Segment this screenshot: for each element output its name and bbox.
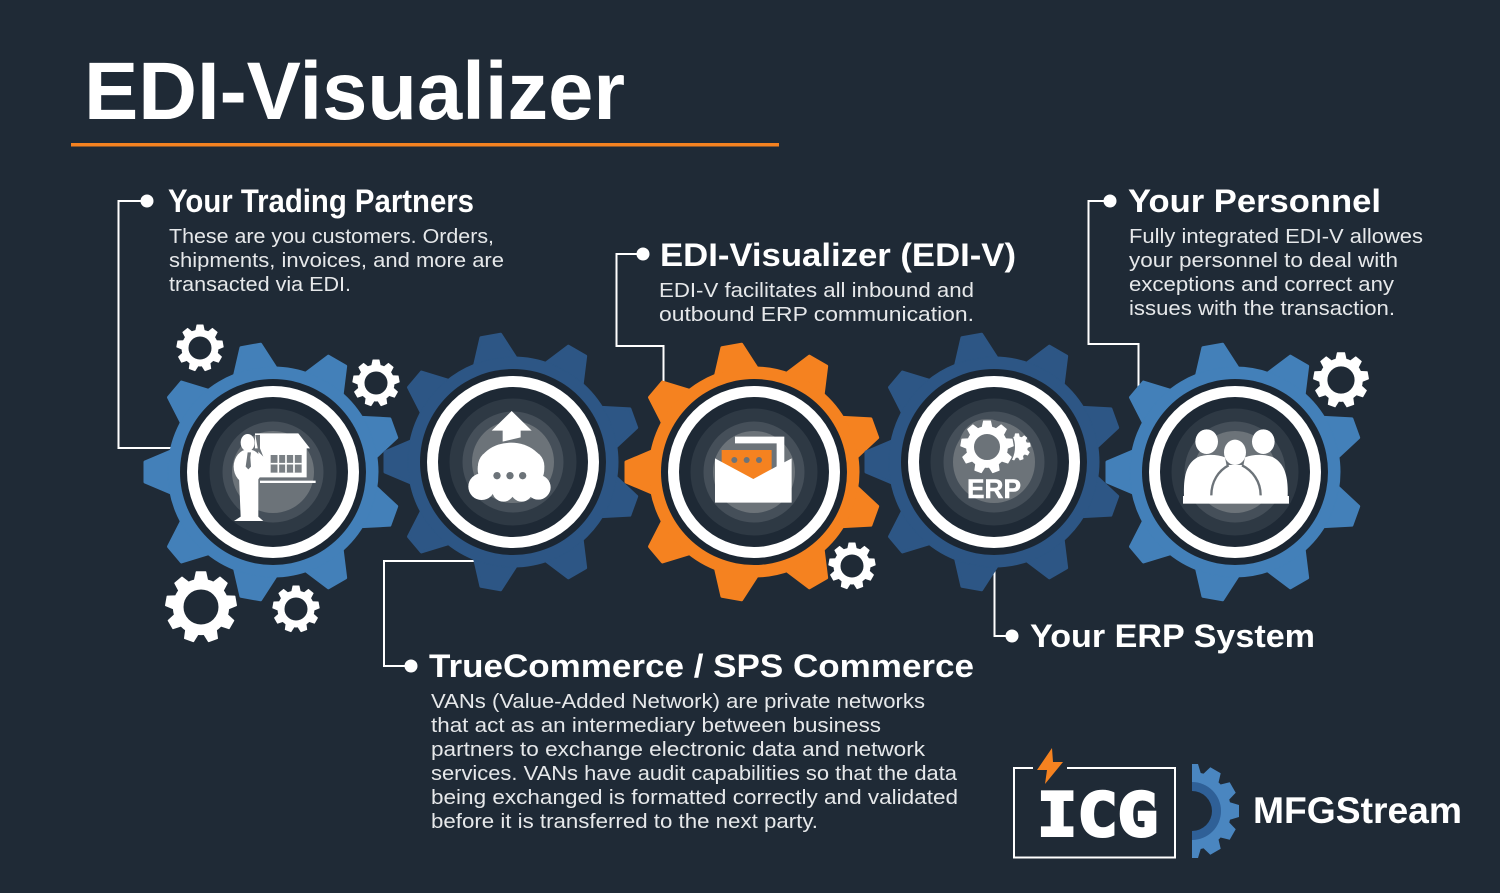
small gear: bottom left large	[165, 572, 237, 642]
body: trading partners: transacted via EDI.	[169, 273, 351, 296]
gear: TrueCommerce / SPS Commerce	[385, 332, 640, 592]
icon: half gear	[1192, 764, 1239, 858]
body: EDI-V	[659, 279, 974, 326]
icon: ERP gears: ERP	[967, 474, 1021, 504]
title underline	[71, 143, 779, 146]
body: trading partners: These are you customers. Orders,	[169, 225, 494, 248]
text block: trading partners	[168, 183, 504, 296]
body: trading partners	[169, 225, 504, 296]
small gear: personnel	[1313, 353, 1369, 407]
heading: personnel: Your Personnel	[1128, 183, 1381, 219]
body: EDI-V: EDI-V facilitates all inbound and	[659, 279, 974, 302]
body: personnel: Fully integrated EDI-V allowes	[1129, 225, 1423, 248]
small gear: top right of first gear	[353, 360, 399, 406]
icon: group of people	[1183, 429, 1289, 504]
body: trading partners: shipments, invoices, and more are	[169, 249, 504, 272]
connector: EDI-V	[616, 248, 664, 386]
gear: personnel	[1107, 342, 1362, 602]
connector: trading partners	[118, 196, 172, 448]
gear: trading partners	[145, 342, 400, 602]
icon: ERP gears	[959, 419, 1031, 504]
logo: MFGStream: MFGStream	[1253, 790, 1462, 831]
text block: EDI-V	[659, 237, 1016, 326]
body: TrueCommerce: partners to exchange electronic data and network	[431, 738, 926, 761]
small gear: bottom	[273, 586, 319, 632]
body: TrueCommerce	[431, 690, 958, 833]
body: TrueCommerce: before it is transferred to the next party.	[431, 810, 818, 833]
body: TrueCommerce: VANs (Value-Added Network) are private networks	[431, 690, 925, 713]
connector: TrueCommerce	[384, 561, 476, 672]
gear: ERP system	[866, 332, 1121, 592]
small gear: below orange gear	[829, 543, 875, 589]
body: personnel: issues with the transaction.	[1129, 297, 1395, 320]
logo: ICG	[1014, 748, 1175, 858]
icon: cloud with arrow	[468, 411, 551, 502]
icon: lightning bolt	[1037, 748, 1063, 784]
logo: ICG: ICG	[1037, 780, 1158, 850]
heading: EDI-V: EDI-Visualizer (EDI-V)	[660, 237, 1016, 273]
icon: person and building	[234, 433, 316, 521]
title: EDI-Visualizer	[84, 46, 625, 137]
body: TrueCommerce: services. VANs have audit capabilities so that the data	[431, 762, 958, 785]
text block: TrueCommerce	[429, 648, 974, 833]
gear: EDI-Visualizer	[626, 342, 881, 602]
body: EDI-V: outbound ERP communication.	[659, 303, 974, 326]
body: personnel: your personnel to deal with	[1129, 249, 1398, 272]
heading: TrueCommerce: TrueCommerce / SPS Commerce	[429, 648, 974, 684]
heading: trading partners: Your Trading Partners	[168, 183, 474, 219]
body: personnel: exceptions and correct any	[1129, 273, 1395, 296]
body: TrueCommerce: that act as an intermediary between business	[431, 714, 881, 737]
body: TrueCommerce: being exchanged is formatted correctly and validated	[431, 786, 958, 809]
logo: MFGStream	[1192, 764, 1460, 858]
body: personnel	[1129, 225, 1423, 320]
connector: ERP system	[994, 566, 1018, 642]
small gear: top left	[177, 325, 223, 371]
text block: personnel	[1128, 183, 1423, 320]
connector: personnel	[1088, 196, 1138, 390]
icon: envelope with messages	[715, 437, 792, 503]
heading: ERP system: Your ERP System	[1030, 618, 1315, 654]
